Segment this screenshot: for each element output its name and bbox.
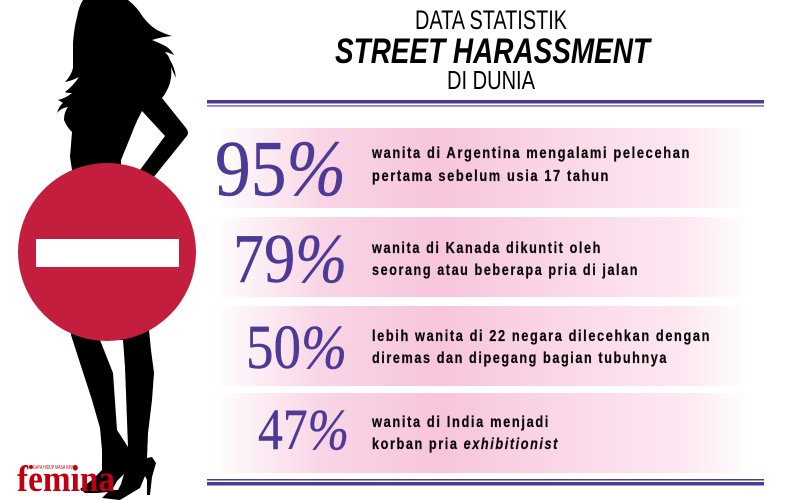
row: 47%: wanita di India menjadi [371,414,550,431]
row: 47%: korban pria exhibitionist [372,436,559,453]
title: DI DUNIA [447,65,536,95]
row: 79%: 79% [233,221,347,298]
row: 50%: lebih wanita di 22 negara dilecehkan dengan [372,328,711,345]
row: 47%: 47% [258,397,349,462]
row: 95%: 95% [215,126,346,213]
row: 50%: 50% [246,314,347,382]
top double rule [207,100,764,107]
no entry sign [18,163,196,341]
title [335,5,652,95]
row: 50%: diremas dan dipegang bagian tubuhnya [372,350,668,367]
title: DATA STATISTIK [415,5,567,35]
row: 95%: pertama sebelum usia 17 tahun [372,168,610,185]
woman silhouette [57,0,188,500]
femina logo: femina [17,459,115,500]
row: 95% [213,126,750,213]
bottom double rule [207,479,764,486]
femina logo: GAYA HIDUP MASA KINI [33,465,73,471]
row: 79%: wanita di Kanada dikuntit oleh [371,240,602,257]
row: 79% [213,217,750,298]
row: 50% [213,306,750,386]
title: STREET HARASSMENT [335,32,652,71]
row: 95%: wanita di Argentina mengalami pelecehan [371,145,691,162]
row: 47% [213,393,750,473]
row: 79%: seorang atau beberapa pria di jalan [372,262,639,279]
